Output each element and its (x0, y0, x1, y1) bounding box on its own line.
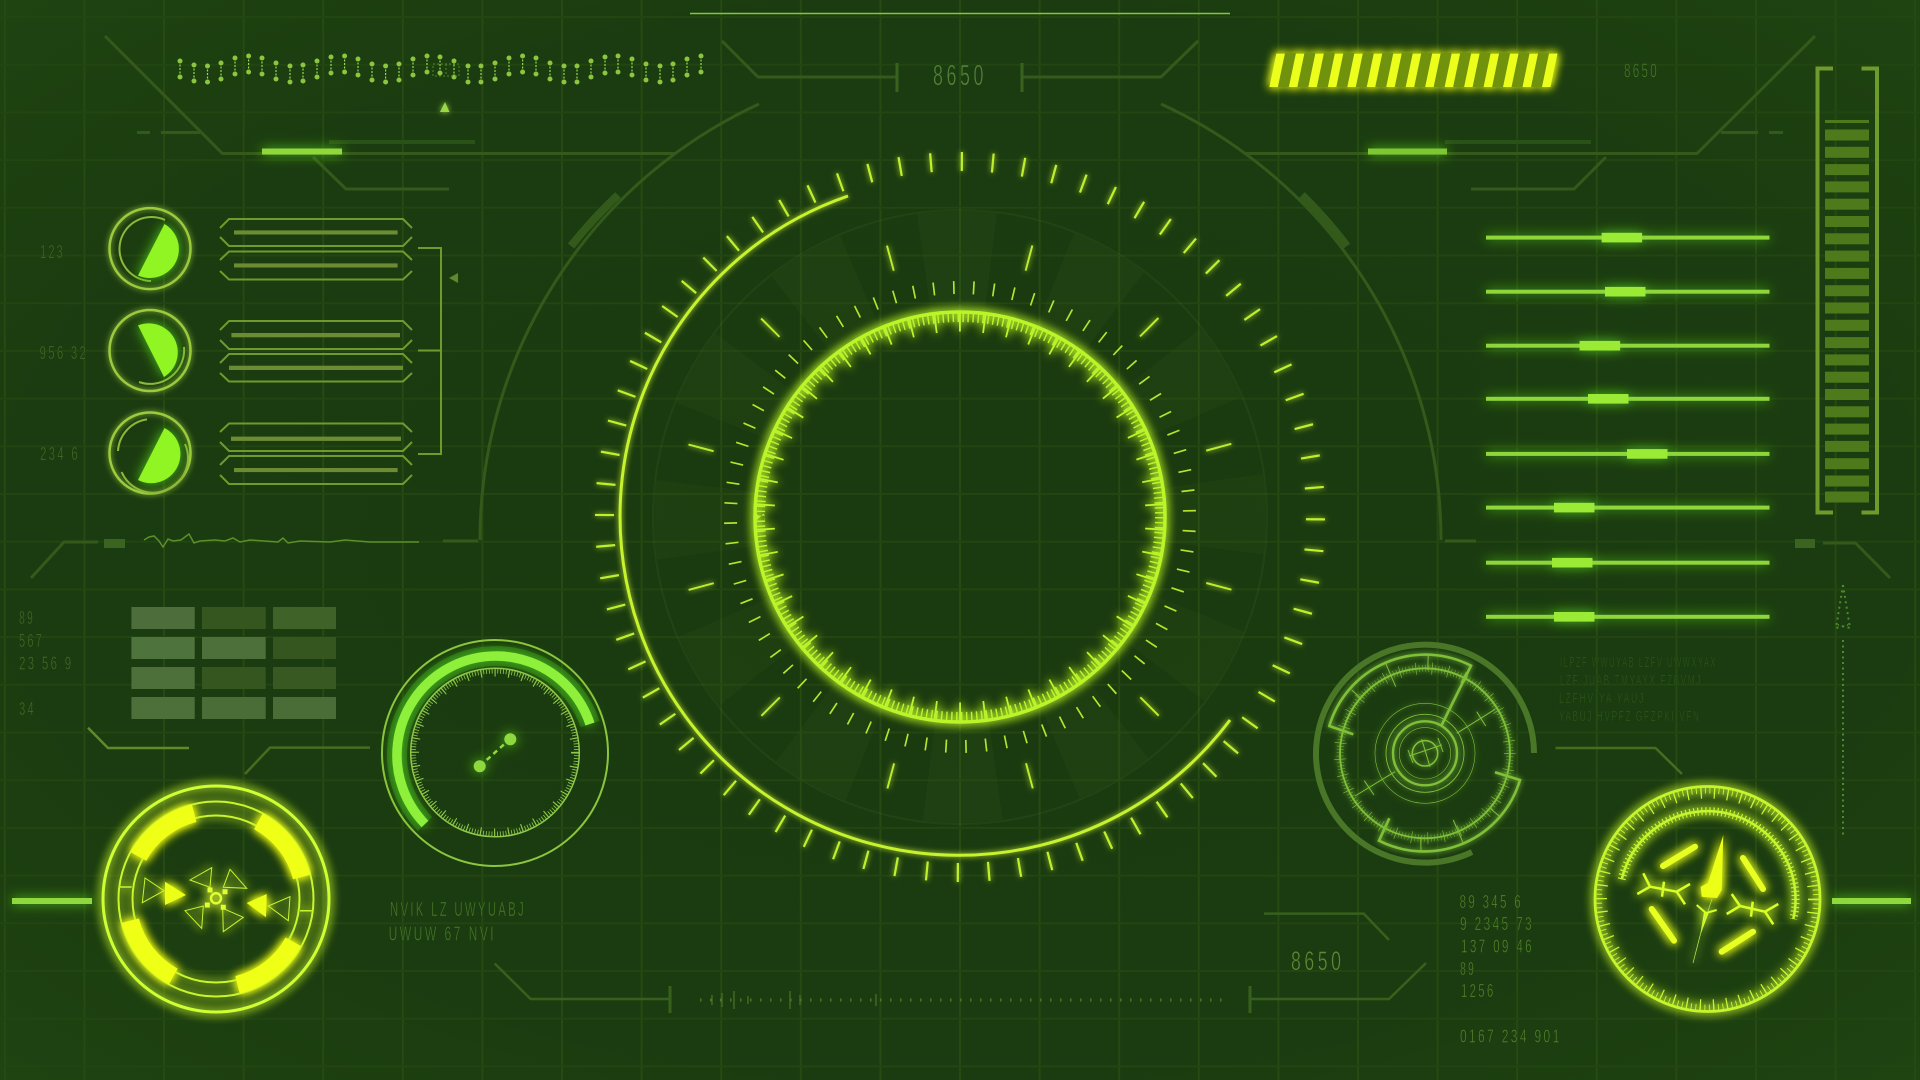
bottom frame left (495, 964, 670, 1013)
top centre bracket with value (722, 41, 1198, 92)
indicator 1 (110, 208, 190, 289)
descriptive text bottom left: UWUW 67 NVI (389, 924, 496, 946)
large left frame arc (480, 104, 759, 540)
left data column: 34 (19, 699, 36, 719)
descriptive text bottom left: NVIK LZ UWYUABJ (390, 899, 526, 921)
top right circuit lines (1244, 36, 1815, 189)
dna style dotted wave (180, 56, 701, 82)
central dial (604, 162, 1316, 872)
faint text block: LZF JUAB TMYAYX FZBVMJ (1560, 672, 1702, 689)
bottom ruler (700, 991, 1227, 1009)
faint sector ring (653, 210, 1267, 824)
left data column (19, 608, 74, 719)
right data column (1460, 892, 1562, 1047)
faint text block: LZFHVIYA YAUJ (1559, 690, 1645, 707)
faint text block: ILPZF WWUYAB LZFV UWWXYAX (1560, 654, 1717, 671)
right side stub (1832, 898, 1911, 904)
waveform strip (31, 534, 1890, 578)
vertical level meter (1818, 68, 1877, 512)
bracket connector with arrow (418, 248, 458, 454)
right data column: 0167 234 901 (1460, 1027, 1562, 1047)
compass dial (1595, 786, 1820, 1012)
bottom value: 8650 (1291, 946, 1344, 976)
panel: hexagonal bar rows (220, 219, 412, 484)
right data column: 89 345 6 (1460, 892, 1523, 912)
panel: left round indicators (110, 208, 190, 494)
right dotted column (1836, 585, 1850, 838)
connector to compass (1556, 748, 1682, 774)
panel: sliders (1486, 233, 1770, 622)
radar dial (1316, 645, 1534, 863)
left side stub (12, 898, 92, 904)
left numeric labels (40, 242, 88, 464)
large right frame arc (1161, 104, 1441, 540)
right data column: 89 (1460, 959, 1476, 979)
top header line (690, 12, 1230, 14)
long middle ticks (692, 249, 1228, 785)
faint text block: YABUJ HVPFZ GFZPKI VFN (1559, 708, 1701, 725)
outer arc (620, 196, 1230, 855)
left numeric labels: 123 (40, 242, 65, 262)
small value top right: 8650 (1624, 60, 1659, 82)
left data column: 89 (19, 608, 35, 628)
gauge left (382, 640, 608, 866)
data block table (131, 607, 336, 719)
indicator 3 (110, 412, 190, 494)
right data column: 9 2345 73 (1460, 914, 1534, 934)
indicator 2 (110, 310, 190, 391)
right data column: 137 09 46 (1461, 936, 1534, 956)
left numeric labels: 234 6 (40, 444, 80, 464)
descriptive text bottom left (389, 899, 526, 946)
inner glowing ring (755, 312, 1165, 722)
right data column: 1256 (1461, 981, 1496, 1001)
lower left connector lines (88, 728, 370, 774)
top centre bracket with value: 8650 (933, 60, 987, 92)
top left circuit lines (105, 36, 676, 189)
left data column: 567 (19, 631, 44, 651)
bottom frame right (1250, 914, 1426, 1013)
faint text block (1559, 654, 1717, 725)
left numeric labels: 956 32 (40, 343, 88, 363)
striped yellow bar (1269, 53, 1557, 87)
short middle ticks (730, 288, 1190, 746)
outer tick ring (604, 162, 1316, 872)
yellow target dial (103, 786, 329, 1012)
left data column: 23 56 9 (19, 654, 74, 674)
icon: small triangle marker (440, 102, 450, 112)
